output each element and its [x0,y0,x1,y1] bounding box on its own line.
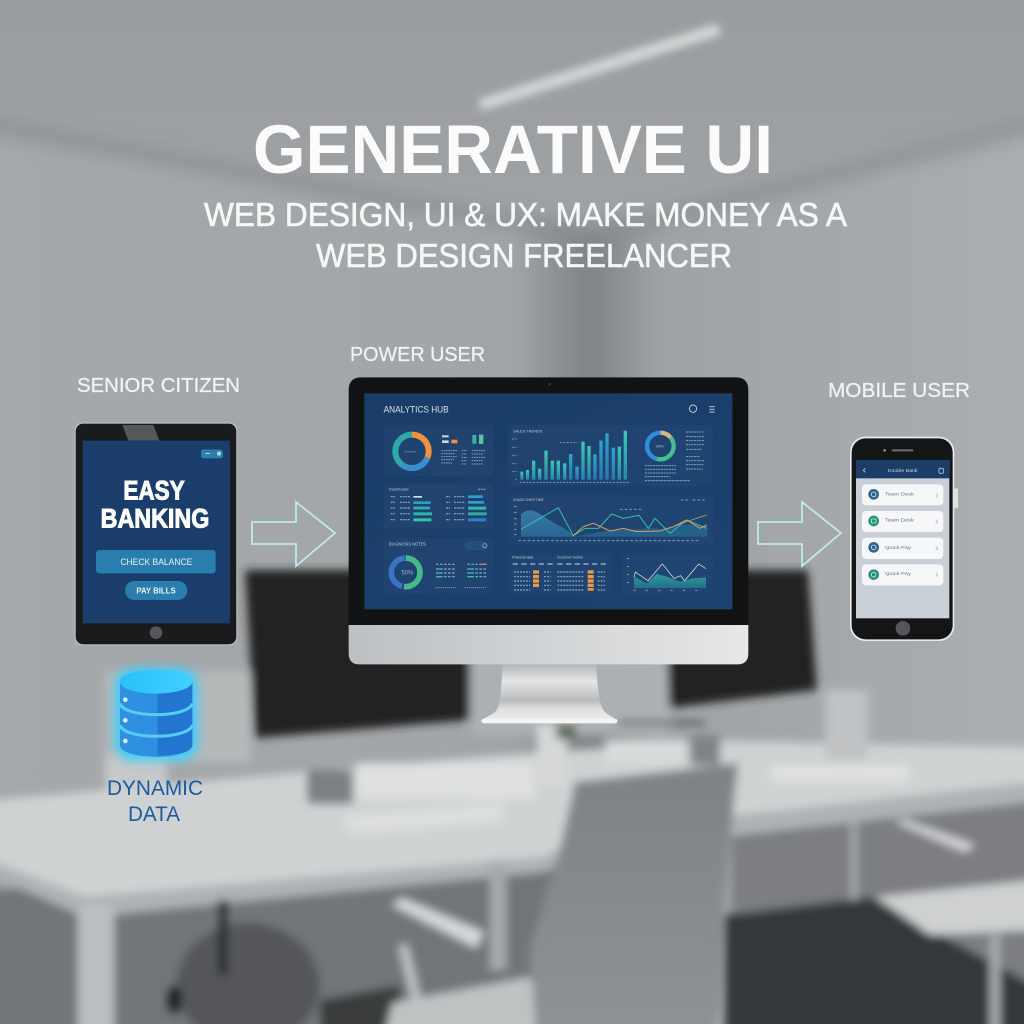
list card 2: Team Desk [885,518,915,524]
desk top [0,741,1024,897]
headline: BANKING [101,503,209,533]
list card 2 [862,511,943,532]
label: dynamic data: DATA [128,803,180,826]
tablet: easy banking [75,423,237,645]
panel: table: Financial stats [512,556,534,560]
panel: bar list [383,484,493,528]
list card 3 [862,538,943,559]
list card 1: Team Desk [885,491,915,497]
desk props [356,763,534,799]
bars [520,431,627,480]
tablet screen [83,441,230,623]
subtitle: WEB DESIGN, UI & UX: MAKE MONEY AS A [204,196,847,233]
monitor stand [481,663,618,723]
headline: EASY [123,475,185,505]
label: power user: POWER USER [350,344,485,366]
subtitle [204,196,847,274]
far monitors [245,570,470,738]
panel: bar chart [508,425,713,486]
desktop monitor [349,377,748,723]
icon: database [114,668,198,761]
list card 1 [862,484,943,505]
button: pay bills: PAY BILLS [136,586,176,596]
label: senior citizen: SENIOR CITIZEN [77,375,240,397]
panel: table: Customer metrics [557,556,583,560]
phone screen [856,460,949,618]
left floor [0,860,560,1024]
button: check balance [96,550,216,573]
label: mobile user: MOBILE USER [828,380,970,402]
panel: donut summary: Overview [404,450,417,454]
arrow: tablet to desktop [252,502,335,566]
back wall under right desk [732,802,1024,1024]
phone screen: Double Bank [888,468,918,474]
panel: line chart: USAGE OVER TIME [513,497,544,502]
chairs [176,923,320,1024]
title: GENERATIVE UI [253,111,773,188]
list card 4: Quick Pay [885,571,912,577]
panel: line chart [508,495,713,545]
phone home button [896,621,910,636]
panel: bar list: Dashboard [389,487,408,492]
header icons [689,405,715,412]
list card 3: Quick Pay [885,545,912,551]
panel: bar chart: SALES TRENDS [513,428,543,433]
phone header [856,460,949,478]
status pill [201,449,223,458]
button: pay bills [125,581,187,600]
phone [850,437,958,641]
label: dynamic data: DYNAMIC [107,777,203,800]
panel: donut summary [383,425,493,476]
panel: donut details: 50% [401,570,414,576]
panel: bar chart: 64% [656,444,664,448]
home button [150,626,162,639]
subtitle: WEB DESIGN FREELANCER [316,237,732,274]
small donut [647,433,674,459]
panel: area chart [623,553,713,593]
panel: donut details [383,538,493,593]
arrow: desktop to phone [758,502,841,566]
list card 4 [862,564,943,585]
button: check balance: CHECK BALANCE [120,557,192,567]
monitor body [349,625,748,664]
wall lower [105,672,250,762]
panel: donut details: DIAGNOSIS NOTES [389,541,426,546]
dashboard title: ANALYTICS HUB [384,405,449,415]
label: dynamic data [107,777,203,826]
headline [101,475,209,533]
dashboard screen [364,393,732,609]
panel: table [507,553,612,593]
